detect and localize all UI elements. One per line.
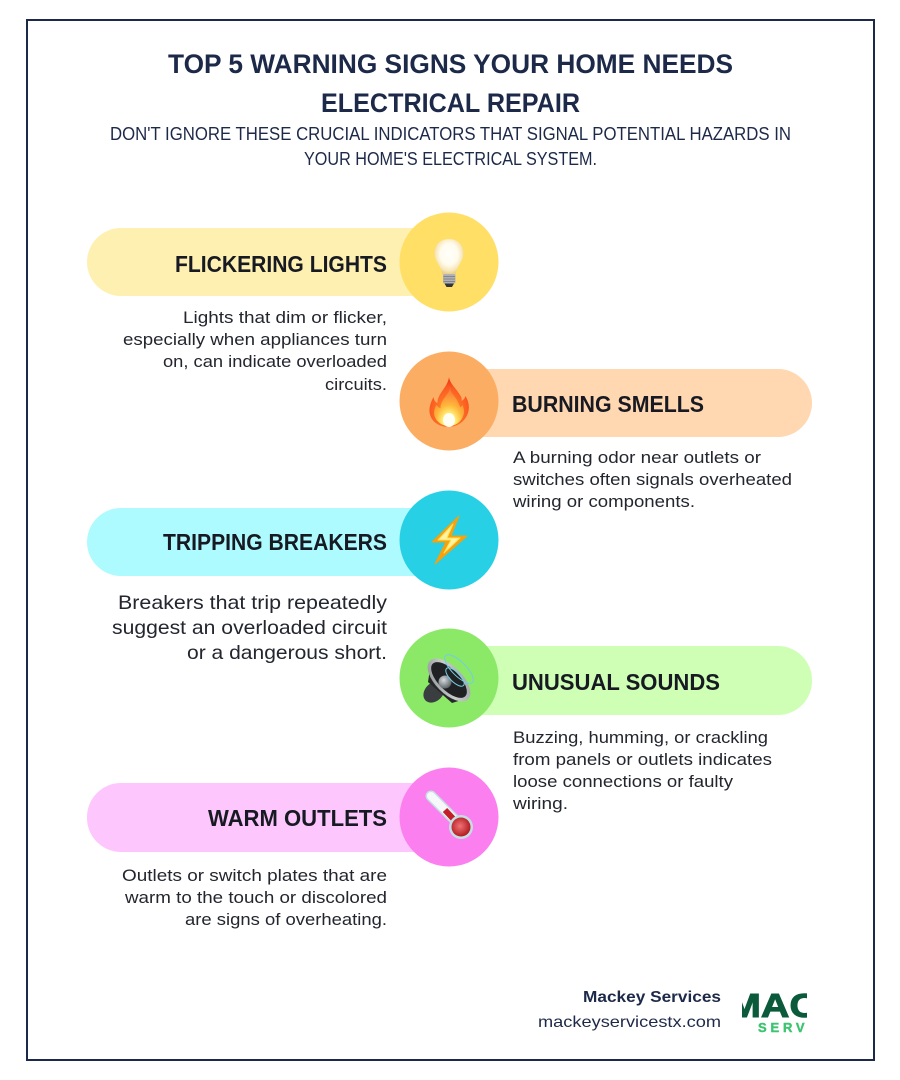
- description: burning smells: [512, 448, 792, 511]
- description: unusual sounds: loose connections or faulty: [513, 772, 734, 791]
- panel: warm outlets: [87, 768, 498, 929]
- icon: light bulb: [434, 239, 464, 287]
- description: flickering lights: [123, 308, 387, 394]
- banner: warm outlets: [87, 783, 449, 852]
- description: tripping breakers: [112, 592, 388, 664]
- icon circle: orange: [400, 352, 498, 450]
- title: TOP 5 WARNING SIGNS YOUR HOME NEEDS: [168, 49, 733, 79]
- logo: [742, 993, 807, 1032]
- icon: thermometer: [431, 796, 473, 839]
- description: tripping breakers: Breakers that trip repeatedly: [118, 592, 387, 614]
- description: flickering lights: especially when appliances turn: [123, 330, 387, 349]
- icon circle: cyan: [400, 490, 498, 590]
- icon: lightning bolt: [432, 516, 467, 564]
- description: unusual sounds: [512, 728, 772, 813]
- description: unusual sounds: wiring.: [512, 794, 568, 813]
- description: tripping breakers: or a dangerous short.: [187, 642, 387, 664]
- icon: speaker: [419, 651, 478, 709]
- description: flickering lights: circuits.: [325, 375, 387, 394]
- panel: tripping breakers: [87, 490, 498, 664]
- description: flickering lights: on, can indicate overloaded: [163, 352, 387, 371]
- heading: flickering lights: FLICKERING LIGHTS: [175, 251, 387, 277]
- banner: flickering lights: [87, 228, 449, 296]
- icon circle: green: [400, 628, 498, 728]
- description: flickering lights: Lights that dim or flicker,: [183, 308, 387, 327]
- footer: website: mackeyservicestx.com: [538, 1014, 721, 1031]
- icon circle: pink: [400, 768, 498, 866]
- subtitle: YOUR HOME'S ELECTRICAL SYSTEM.: [304, 149, 597, 169]
- icon circle: yellow: [400, 212, 498, 312]
- heading: burning smells: BURNING SMELLS: [512, 391, 704, 417]
- heading: unusual sounds: UNUSUAL SOUNDS: [512, 669, 720, 695]
- title: ELECTRICAL REPAIR: [321, 88, 580, 118]
- heading: tripping breakers: TRIPPING BREAKERS: [163, 529, 387, 555]
- banner: burning smells: [449, 369, 812, 437]
- description: burning smells: switches often signals overheated: [513, 470, 792, 489]
- panel: flickering lights: [87, 212, 498, 394]
- description: warm outlets: [122, 866, 387, 929]
- panel: unusual sounds: [400, 628, 812, 813]
- footer: company name: Mackey Services: [583, 989, 721, 1006]
- subtitle: DON'T IGNORE THESE CRUCIAL INDICATORS THAT SIGNAL POTENTIAL HAZARDS IN: [110, 124, 791, 144]
- banner: tripping breakers: [87, 508, 449, 576]
- logo: MAC: [728, 987, 818, 1024]
- title: [168, 49, 733, 118]
- description: burning smells: A burning odor near outlets or: [513, 448, 761, 467]
- heading: warm outlets: WARM OUTLETS: [208, 805, 387, 831]
- logo: SERV: [758, 1020, 808, 1035]
- description: warm outlets: Outlets or switch plates that are: [122, 866, 387, 885]
- description: unusual sounds: Buzzing, humming, or crackling: [513, 728, 768, 747]
- description: warm outlets: are signs of overheating.: [185, 910, 387, 929]
- icon: fire: [429, 377, 469, 427]
- panel: burning smells: [400, 352, 812, 511]
- subtitle: [110, 124, 791, 169]
- description: tripping breakers: suggest an overloaded circuit: [112, 617, 388, 639]
- banner: unusual sounds: [449, 646, 812, 715]
- description: warm outlets: warm to the touch or discolored: [124, 888, 387, 907]
- description: burning smells: wiring or components.: [512, 492, 695, 511]
- description: unusual sounds: from panels or outlets indicates: [513, 750, 772, 769]
